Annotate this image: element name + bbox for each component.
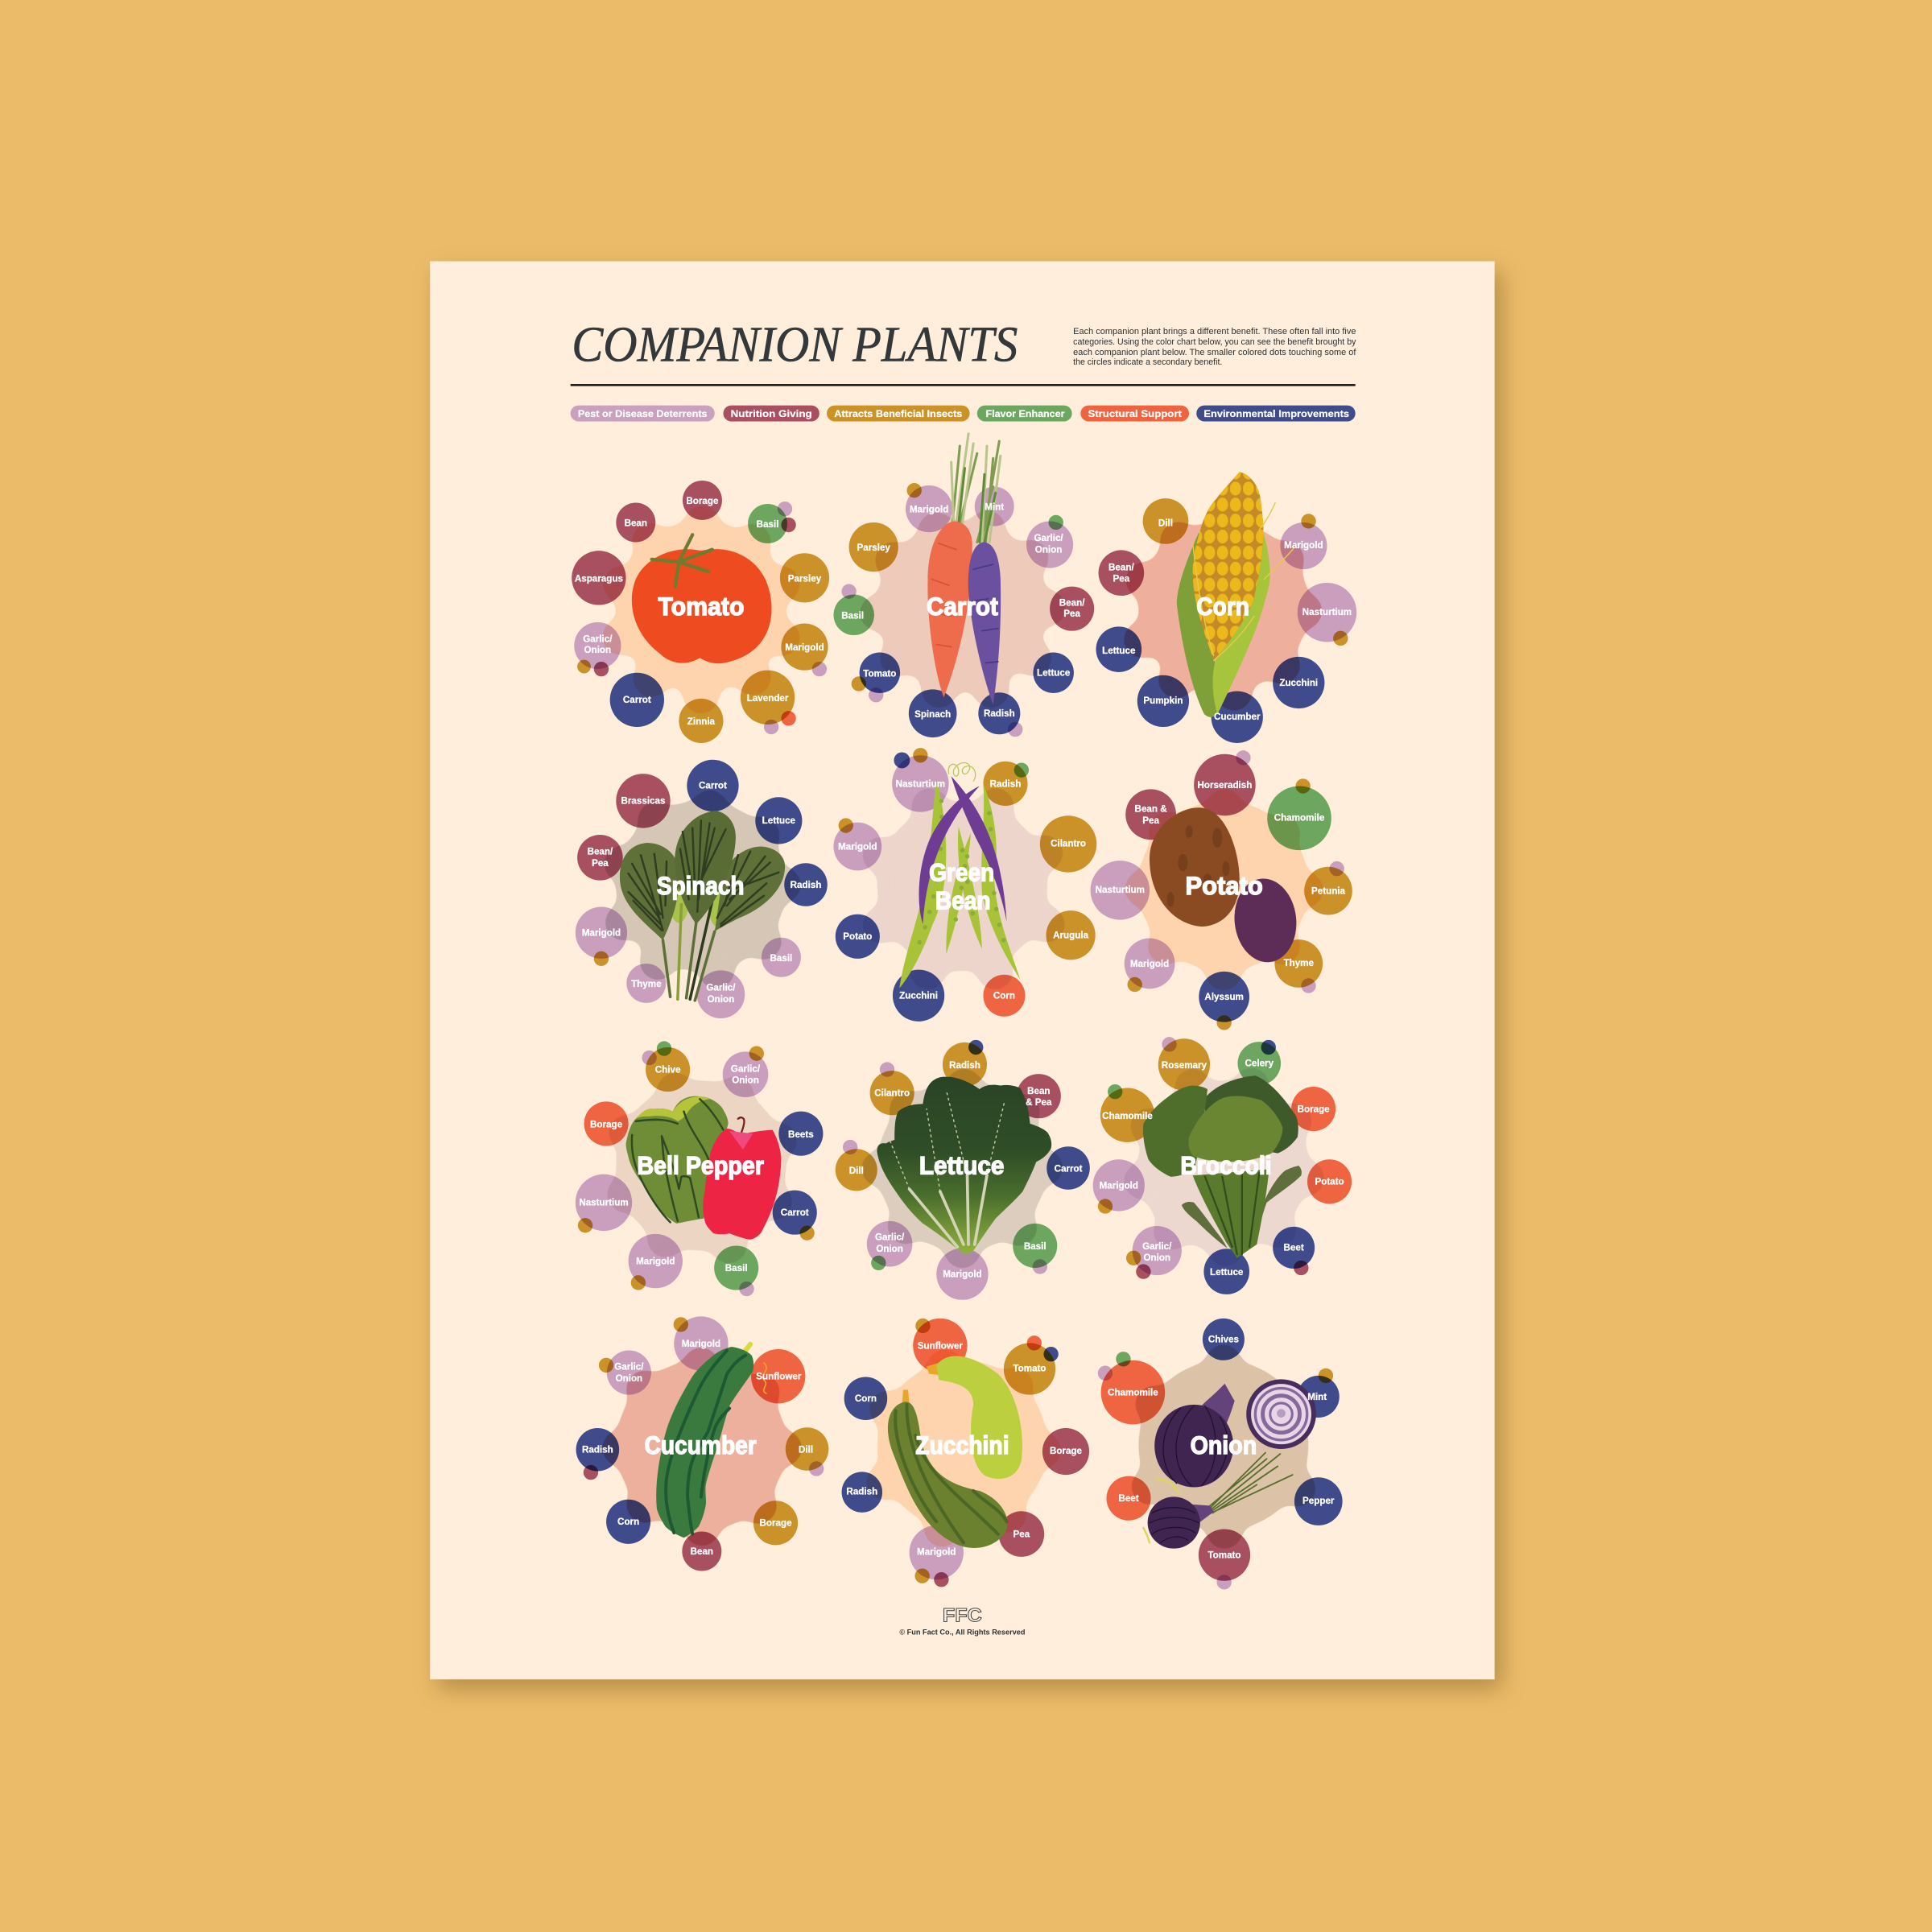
- companion labels: Borage: [686, 496, 719, 506]
- legend: structural support: [1080, 406, 1189, 421]
- legend: flavor enhancer: [977, 406, 1072, 421]
- companion labels: [1096, 780, 1346, 1002]
- companion labels: Marigold: [917, 1547, 956, 1558]
- companion labels: Radish: [984, 708, 1015, 719]
- companion labels: Mint: [1307, 1392, 1327, 1402]
- plant name: [929, 858, 994, 915]
- companion labels: Rosemary: [1162, 1060, 1208, 1071]
- companion labels: Pumpkin: [1143, 696, 1183, 706]
- companion labels: Carrot: [781, 1208, 809, 1218]
- companion labels: Pea: [1113, 573, 1130, 584]
- panel: Corn: [1096, 472, 1356, 743]
- companion labels: Pea: [1063, 609, 1081, 619]
- companion labels: Lavender: [747, 693, 789, 704]
- panel: Broccoli: [1093, 1037, 1352, 1294]
- companion labels: Cilantro: [1051, 839, 1086, 849]
- companion labels: Zucchini: [1279, 678, 1318, 688]
- companion labels: Petunia: [1311, 886, 1346, 896]
- companion labels: [838, 778, 1089, 1001]
- companion labels: Garlic/: [583, 634, 613, 644]
- companion labels: Onion: [732, 1075, 759, 1085]
- blob: spinach: [617, 801, 786, 971]
- legend: attracts beneficial insects: [827, 406, 970, 421]
- companion labels: Zucchini: [899, 991, 938, 1001]
- blob: onion: [1139, 1360, 1308, 1531]
- icon: cucumber: [656, 1344, 766, 1538]
- companion labels: Carrot: [623, 695, 651, 705]
- icon: potatoes: [1150, 807, 1300, 965]
- companion labels: Marigold: [582, 928, 621, 939]
- companion labels: Marigold: [1284, 540, 1323, 551]
- companion labels: Asparagus: [575, 573, 623, 584]
- companion labels: [841, 502, 1085, 720]
- companion labels: Borage: [1298, 1104, 1330, 1114]
- companion circles: [1093, 1037, 1352, 1294]
- companion labels: Beets: [788, 1129, 814, 1140]
- companion labels: [1102, 518, 1352, 722]
- title rule: [571, 384, 1356, 386]
- companion labels: [846, 1340, 1083, 1558]
- companion labels: Tomato: [1013, 1364, 1046, 1374]
- companion labels: Horseradish: [1198, 780, 1252, 791]
- companion labels: Lettuce: [1102, 646, 1136, 656]
- panel: Spinach: [576, 760, 828, 1018]
- companion labels: Arugula: [1053, 931, 1089, 941]
- companion labels: [582, 781, 821, 1005]
- legend: nutrition giving: Nutrition Giving: [731, 408, 812, 419]
- companion labels: Marigold: [838, 841, 877, 852]
- companion labels: Potato: [1315, 1177, 1344, 1187]
- companion labels: Lettuce: [1210, 1267, 1244, 1278]
- companion labels: Dill: [799, 1445, 813, 1455]
- companion labels: Cilantro: [874, 1088, 910, 1098]
- logo: FFC: FFC: [943, 1604, 982, 1626]
- companion circles: [572, 481, 829, 743]
- companion labels: Bean: [1027, 1086, 1051, 1096]
- companion labels: Chamomile: [1274, 812, 1325, 823]
- companion labels: Beet: [1118, 1493, 1139, 1504]
- plant name: Lettuce: [919, 1152, 1004, 1180]
- companion labels: Pea: [1142, 815, 1159, 826]
- blob: bell pepper: [617, 1081, 786, 1250]
- legend: nutrition giving: [723, 406, 819, 421]
- companion labels: Basil: [757, 519, 778, 530]
- intro paragraph: each companion plant below. The smaller colored dots touching some of: [1073, 348, 1356, 357]
- legend: attracts beneficial insects: Attracts Beneficial Insects: [834, 408, 963, 419]
- plant name: Tomato: [658, 592, 744, 621]
- companion labels: Pea: [592, 858, 609, 869]
- companion labels: Garlic/: [731, 1064, 761, 1075]
- companion labels: Marigold: [1130, 959, 1169, 969]
- companion labels: Radish: [791, 880, 821, 890]
- companion labels: Marigold: [636, 1256, 675, 1266]
- companion labels: Corn: [993, 991, 1015, 1001]
- legend: pest or disease deterrents: [571, 406, 715, 421]
- companion labels: Carrot: [699, 781, 727, 791]
- icon: tomato: [632, 535, 772, 663]
- companion labels: Corn: [617, 1517, 639, 1527]
- companion labels: Marigold: [943, 1269, 982, 1279]
- companion labels: Basil: [725, 1263, 748, 1274]
- companion labels: Thyme: [1284, 958, 1315, 968]
- companion labels: Marigold: [910, 505, 948, 515]
- companion labels: Marigold: [785, 642, 824, 653]
- companion labels: Pepper: [1302, 1496, 1335, 1506]
- companion labels: Lettuce: [762, 815, 796, 826]
- plant name: Broccoli: [1180, 1152, 1272, 1180]
- plant name: Green: [929, 858, 994, 886]
- companion labels: [575, 496, 824, 727]
- companion labels: Bean &: [1135, 804, 1167, 815]
- legend: [571, 406, 1356, 421]
- plant name: Potato: [1185, 872, 1263, 900]
- companion circles: [833, 483, 1094, 737]
- panel: Lettuce: [836, 1040, 1090, 1300]
- companion labels: Onion: [1035, 544, 1062, 555]
- companion labels: & Pea: [1026, 1097, 1052, 1108]
- companion labels: Pea: [1013, 1529, 1030, 1539]
- companion labels: Alyssum: [1204, 992, 1244, 1002]
- icon: zucchinis: [888, 1356, 1022, 1548]
- blob: green bean: [877, 801, 1046, 972]
- intro paragraph: [1073, 327, 1356, 367]
- icon: spinach: [620, 811, 785, 1001]
- companion labels: Marigold: [1100, 1180, 1138, 1191]
- companion labels: Basil: [1024, 1241, 1046, 1252]
- icon: bell peppers: [626, 1096, 781, 1240]
- plant name: Bean: [935, 887, 991, 915]
- companion labels: Bean/: [1108, 563, 1134, 573]
- legend: environmental improvements: [1196, 406, 1356, 421]
- companion labels: Garlic/: [1034, 533, 1063, 543]
- companion labels: Garlic/: [875, 1232, 905, 1243]
- companion labels: Onion: [616, 1373, 642, 1384]
- legend: environmental improvements: Environmental Improvements: [1203, 408, 1349, 419]
- blob: tomato: [617, 522, 786, 696]
- companion labels: Nasturtium: [1302, 607, 1352, 617]
- companion labels: Celery: [1245, 1059, 1274, 1069]
- companion circles: [576, 760, 828, 1018]
- companion labels: Brassicas: [621, 796, 665, 807]
- companion labels: [579, 1064, 814, 1274]
- panel: Carrot: [833, 434, 1094, 737]
- companion circles: [1098, 1319, 1343, 1589]
- blob: broccoli: [1139, 1081, 1308, 1250]
- blob: corn: [1139, 522, 1308, 693]
- companion labels: Sunflower: [756, 1372, 802, 1382]
- blob: carrot: [877, 522, 1048, 691]
- companion labels: Tomato: [863, 668, 896, 679]
- companion circles: [1091, 750, 1352, 1030]
- icon: green beans: [899, 762, 1020, 989]
- panel: Onion: [1098, 1319, 1343, 1589]
- companion labels: Tomato: [1208, 1550, 1241, 1560]
- companion labels: Borage: [1050, 1446, 1083, 1456]
- icon: lettuce: [877, 1077, 1051, 1253]
- companion labels: Borage: [759, 1518, 792, 1529]
- companion labels: [582, 1339, 813, 1557]
- companion labels: Chives: [1208, 1335, 1239, 1345]
- plant name: Carrot: [927, 592, 998, 621]
- panel: Cucumber: [576, 1316, 828, 1571]
- companion circles: [576, 1316, 828, 1571]
- companion labels: [1100, 1059, 1344, 1278]
- plant name: Spinach: [657, 872, 744, 900]
- icon: corn: [1177, 472, 1294, 717]
- companion labels: Onion: [1143, 1253, 1170, 1263]
- companion labels: Parsley: [788, 573, 822, 584]
- blob: zucchini: [877, 1360, 1046, 1530]
- companion labels: Onion: [584, 645, 611, 655]
- blob: potato: [1139, 801, 1308, 972]
- companion labels: Mint: [985, 502, 1004, 513]
- companion labels: Potato: [843, 931, 872, 942]
- companion labels: Radish: [990, 778, 1021, 789]
- plant name: Corn: [1196, 592, 1249, 621]
- intro paragraph: Each companion plant brings a different benefit. These often fall into five: [1073, 327, 1356, 336]
- companion labels: Onion: [708, 994, 734, 1005]
- companion circles: [576, 1041, 823, 1296]
- companion labels: Chamomile: [1108, 1387, 1158, 1397]
- intro paragraph: categories. Using the color chart below, you can see the benefit brought by: [1073, 337, 1356, 347]
- companion labels: Nasturtium: [579, 1198, 629, 1208]
- companion labels: Carrot: [1055, 1164, 1083, 1174]
- companion labels: Sunflower: [918, 1340, 963, 1351]
- companion labels: Parsley: [857, 543, 890, 553]
- companion labels: Zinnia: [687, 716, 716, 727]
- panel: Green Bean: [833, 748, 1096, 1022]
- companion circles: [1096, 498, 1356, 743]
- companion labels: Radish: [949, 1060, 980, 1071]
- plant name: Onion: [1191, 1431, 1257, 1459]
- companion labels: Garlic/: [614, 1361, 644, 1372]
- companion labels: Basil: [841, 610, 864, 621]
- companion labels: Basil: [770, 953, 792, 964]
- companion labels: Radish: [846, 1487, 877, 1497]
- companion labels: Borage: [590, 1120, 623, 1130]
- companion labels: Lettuce: [1037, 668, 1071, 679]
- companion labels: Bean/: [1059, 597, 1085, 608]
- companion circles: [836, 1040, 1090, 1300]
- panel: Zucchini: [842, 1319, 1089, 1587]
- intro paragraph: the circles indicate a secondary benefit.: [1073, 357, 1222, 367]
- plant name: Cucumber: [645, 1431, 757, 1459]
- companion labels: Nasturtium: [896, 778, 945, 789]
- companion circles: [833, 748, 1096, 1022]
- companion labels: [1108, 1335, 1335, 1560]
- plant name: Bell Pepper: [637, 1152, 764, 1180]
- title: COMPANION PLANTS: [572, 316, 1018, 372]
- companion labels: Thyme: [631, 979, 662, 989]
- companion labels: Cucumber: [1214, 712, 1261, 722]
- companion labels: Garlic/: [1142, 1241, 1172, 1252]
- companion circles: [842, 1319, 1089, 1587]
- companion labels: Radish: [582, 1445, 613, 1455]
- companion labels: Dill: [849, 1166, 864, 1176]
- companion labels: Beet: [1284, 1243, 1304, 1253]
- poster shadow: [437, 271, 1502, 1689]
- blob: cucumber: [617, 1360, 786, 1530]
- companion labels: Chamomile: [1102, 1111, 1153, 1121]
- blob: lettuce: [877, 1081, 1046, 1250]
- companion labels: Garlic/: [706, 983, 736, 993]
- legend: pest or disease deterrents: Pest or Disease Deterrents: [578, 408, 708, 419]
- icon: onions: [1143, 1379, 1316, 1549]
- poster sheet: [430, 261, 1495, 1679]
- legend: structural support: Structural Support: [1088, 408, 1182, 419]
- companion labels: Nasturtium: [1096, 885, 1145, 895]
- plant name: Zucchini: [915, 1431, 1009, 1459]
- companion labels: Bean/: [588, 846, 613, 857]
- icon: broccoli: [1143, 1075, 1302, 1258]
- legend: flavor enhancer: Flavor Enhancer: [985, 408, 1065, 419]
- companion labels: Chive: [655, 1064, 681, 1075]
- companion labels: Onion: [876, 1244, 903, 1254]
- companion labels: Bean: [691, 1546, 713, 1557]
- panel: Bell Pepper: [576, 1041, 823, 1296]
- companion labels: Spinach: [914, 709, 951, 720]
- companion labels: Marigold: [682, 1339, 720, 1349]
- companion labels: [849, 1060, 1083, 1279]
- companion labels: Bean: [625, 518, 647, 529]
- companion labels: Dill: [1158, 518, 1173, 529]
- panel: Potato: [1091, 750, 1352, 1030]
- companion labels: Corn: [855, 1393, 877, 1404]
- icon: carrots: [927, 434, 1001, 705]
- copyright: © Fun Fact Co., All Rights Reserved: [899, 1628, 1025, 1636]
- panel: Tomato: [572, 481, 829, 743]
